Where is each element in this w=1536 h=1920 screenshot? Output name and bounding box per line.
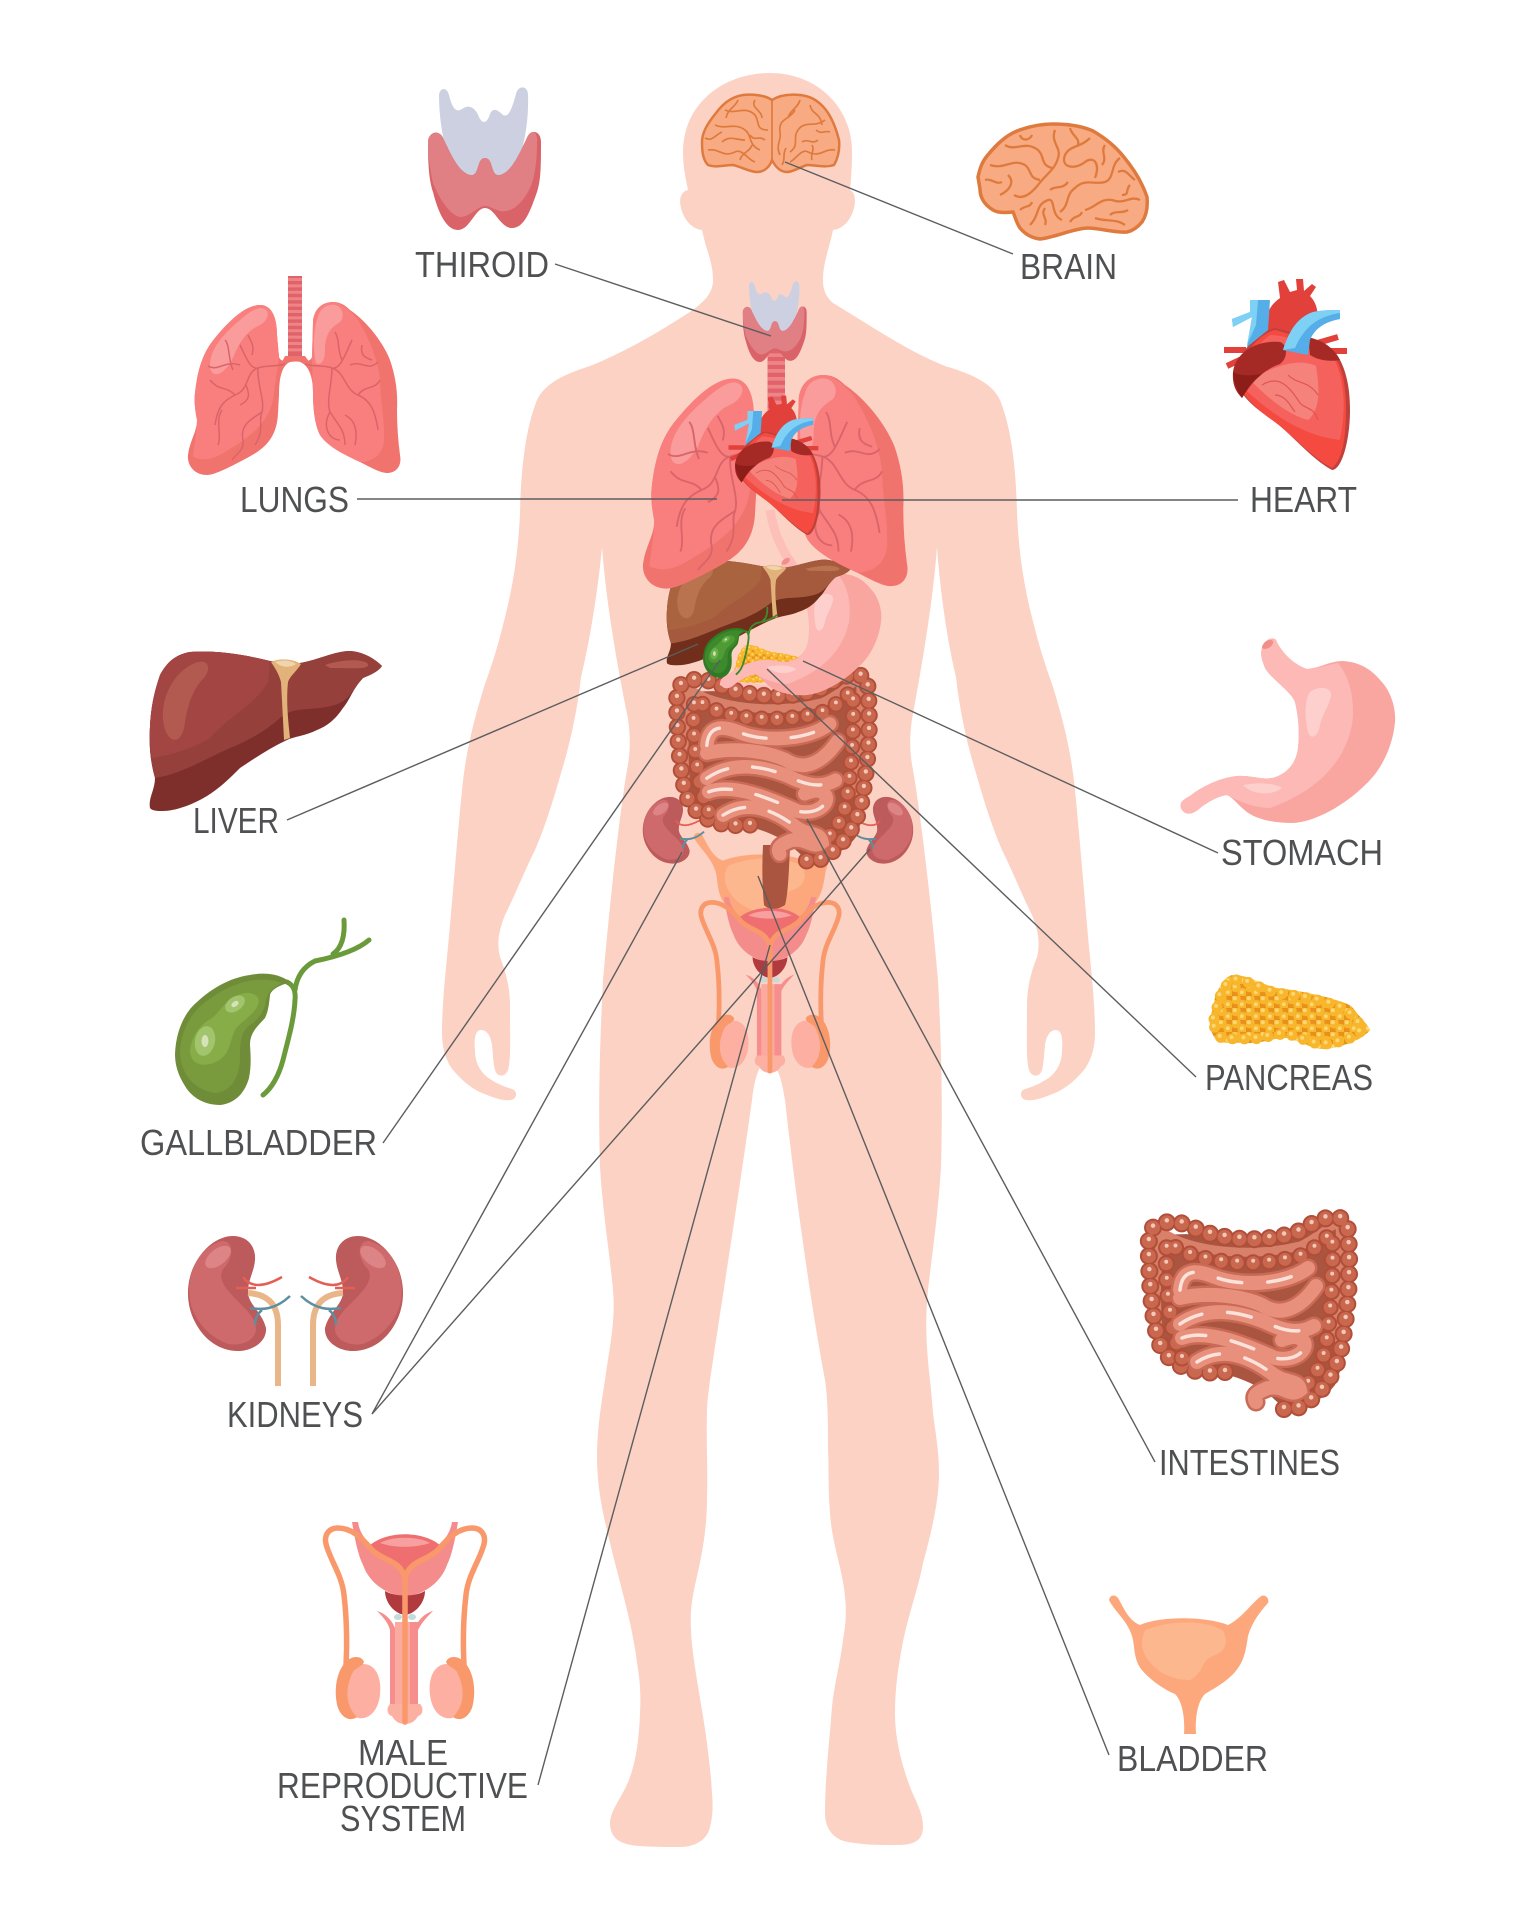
- leader line: heart: [782, 499, 1238, 501]
- icon: stomach: [1180, 638, 1395, 823]
- label: male reproductive system: REPRODUCTIVE: [277, 1765, 528, 1806]
- icon: lungs: [188, 276, 400, 475]
- body: gallbladder: [703, 608, 777, 678]
- icon: heart: [1224, 279, 1350, 470]
- leader line: lungs: [357, 498, 717, 500]
- label: kidneys: KIDNEYS: [227, 1394, 363, 1435]
- body: right kidney: [852, 797, 913, 864]
- body: male reproductive system: [701, 897, 839, 1073]
- icon: male reproductive system: [326, 1522, 484, 1724]
- leader line: thyroid: [555, 264, 771, 336]
- body: lungs: [643, 343, 908, 589]
- body: duodenum: [727, 672, 805, 696]
- icon: bladder: [1109, 1596, 1268, 1734]
- leader line: liver: [287, 644, 698, 820]
- leader line: intestines: [807, 819, 1155, 1462]
- leader line: brain: [785, 162, 1013, 254]
- label: gallbladder: GALLBLADDER: [140, 1122, 377, 1163]
- leader line: bladder: [758, 876, 1109, 1755]
- label: thyroid: THIROID: [415, 244, 549, 285]
- icon: kidneys: [188, 1236, 403, 1386]
- body: brain front view: [702, 95, 839, 172]
- icon: brain: [978, 124, 1147, 239]
- icon: pancreas: [1210, 975, 1370, 1049]
- icon: gallbladder: [175, 920, 369, 1105]
- leader line: stomach: [803, 661, 1218, 853]
- icon: liver: [150, 651, 382, 811]
- body: bladder: [694, 833, 845, 964]
- icon: thyroid: [428, 87, 541, 230]
- body: liver: [667, 560, 850, 665]
- label: male reproductive system: MALE: [358, 1732, 448, 1773]
- esophagus: [770, 510, 800, 575]
- leader line: pancreas: [767, 669, 1196, 1077]
- label: intestines: INTESTINES: [1159, 1442, 1340, 1483]
- label: stomach: STOMACH: [1221, 832, 1383, 873]
- icon: intestines: [1147, 1215, 1351, 1409]
- body: intestines: [675, 673, 871, 861]
- label: bladder: BLADDER: [1117, 1738, 1268, 1779]
- organs inside the body: [643, 95, 913, 1073]
- body: pancreas: [735, 645, 823, 686]
- label: liver: LIVER: [193, 800, 279, 841]
- leader lines: kidneys: [372, 849, 870, 1414]
- body: thyroid: [743, 281, 807, 362]
- leader line: male reproductive system: [538, 945, 770, 1785]
- body: left kidney: [643, 797, 704, 864]
- label: male reproductive system: SYSTEM: [340, 1798, 466, 1839]
- label: brain: BRAIN: [1020, 246, 1117, 287]
- label: male reproductive system: [277, 1732, 528, 1839]
- body silhouette: [442, 73, 1095, 1847]
- label: heart: HEART: [1250, 479, 1357, 520]
- body: heart: [729, 396, 820, 535]
- label: pancreas: PANCREAS: [1205, 1057, 1373, 1098]
- leader line: gallbladder: [383, 660, 720, 1143]
- body: rectum: [762, 845, 790, 909]
- body: stomach: [720, 557, 881, 695]
- label: lungs: LUNGS: [240, 479, 349, 520]
